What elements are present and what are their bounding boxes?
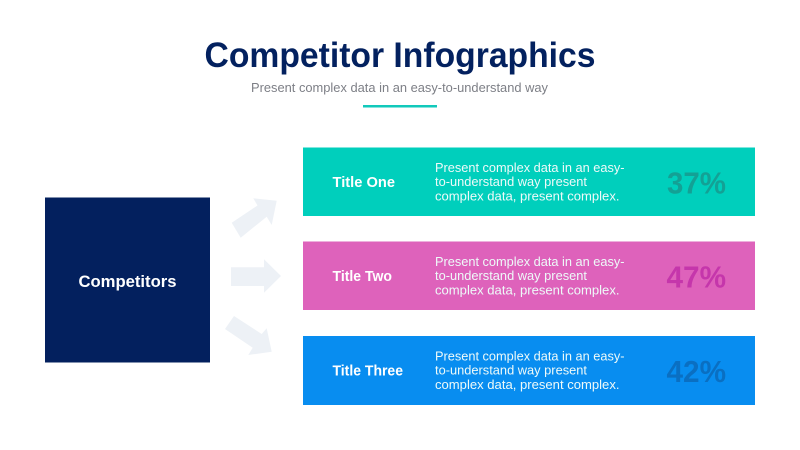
card description: Present complex data in an easy- — [435, 254, 624, 269]
arrow: up-right — [232, 198, 277, 238]
accent underline — [363, 105, 437, 108]
arrow: down-right — [225, 316, 272, 355]
card description — [435, 160, 624, 204]
card description: complex data, present complex. — [435, 188, 620, 204]
card title: Title Two — [332, 269, 392, 285]
title: Competitor Infographics — [204, 36, 596, 75]
subtitle: Present complex data in an easy-to-understand way — [251, 80, 548, 95]
percentage: 42% — [666, 354, 726, 389]
panel: title three — [303, 336, 755, 405]
card description: complex data, present complex. — [435, 377, 620, 392]
card description: Present complex data in an easy- — [435, 348, 624, 364]
card description — [435, 254, 624, 298]
panel: competitors: Competitors — [78, 272, 176, 291]
card description: complex data, present complex. — [435, 282, 620, 298]
panel: title two — [303, 242, 755, 310]
panel: title one — [303, 148, 755, 216]
card description: to-understand way present — [435, 268, 587, 283]
card title: Title One — [332, 175, 395, 191]
card description: to-understand way present — [435, 174, 587, 189]
panel: competitors — [45, 198, 210, 362]
card description — [435, 348, 624, 392]
percentage: 47% — [666, 260, 726, 294]
card description: to-understand way present — [435, 362, 587, 378]
card title: Title Three — [332, 364, 403, 380]
arrow: right — [231, 259, 281, 293]
percentage: 37% — [667, 166, 726, 200]
card description: Present complex data in an easy- — [435, 160, 624, 175]
